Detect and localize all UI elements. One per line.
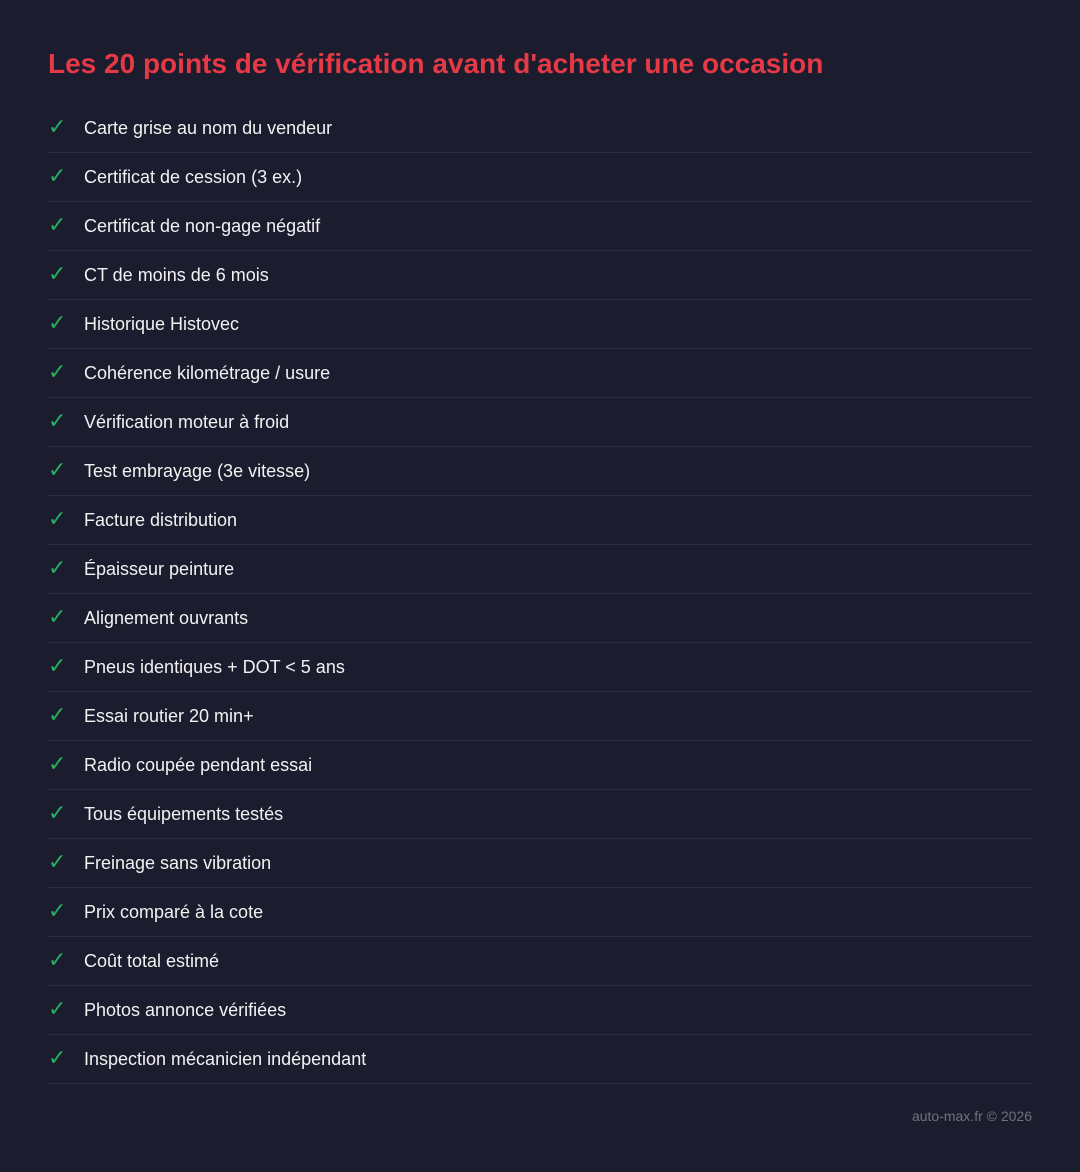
item 3 [48, 202, 1032, 251]
item 19: ✓ [48, 997, 66, 1022]
item 13: Essai routier 20 min+ [84, 706, 254, 726]
footer: auto-max.fr © 2026 [912, 1108, 1032, 1124]
item 13: ✓ [48, 703, 66, 728]
item 8 [48, 447, 1032, 496]
item 8: ✓ [48, 458, 66, 483]
item 4: ✓ [48, 262, 66, 287]
item 15 [48, 790, 1032, 839]
item 20: Inspection mécanicien indépendant [84, 1048, 366, 1068]
item 9 [48, 496, 1032, 545]
item 9: ✓ [48, 507, 66, 532]
item 11 [48, 594, 1032, 643]
item 1 [48, 104, 1032, 153]
item 13 [48, 692, 1032, 741]
item 14: ✓ [48, 752, 66, 777]
item 5: Historique Histovec [84, 314, 239, 334]
item 20 [48, 1035, 1032, 1084]
item 11: ✓ [48, 605, 66, 630]
item 15: Tous équipements testés [84, 804, 283, 824]
item 7: ✓ [48, 409, 66, 434]
item 6: Cohérence kilométrage / usure [84, 362, 330, 382]
item 18: Coût total estimé [84, 950, 219, 970]
item 2: ✓ [48, 164, 66, 189]
item 12 [48, 643, 1032, 692]
item 15: ✓ [48, 801, 66, 826]
item 19: Photos annonce vérifiées [84, 1000, 286, 1020]
item 10: ✓ [48, 556, 66, 581]
item 14: Radio coupée pendant essai [84, 754, 312, 774]
item 2: Certificat de cession (3 ex.) [84, 166, 302, 186]
item 18: ✓ [48, 948, 66, 973]
item 16: ✓ [48, 850, 66, 875]
item 3: ✓ [48, 213, 66, 238]
item 7: Vérification moteur à froid [84, 412, 289, 432]
item 4: CT de moins de 6 mois [84, 264, 269, 284]
item 10 [48, 545, 1032, 594]
item 2 [48, 153, 1032, 202]
item 16: Freinage sans vibration [84, 852, 271, 872]
item 17: ✓ [48, 899, 66, 924]
item 1: Carte grise au nom du vendeur [84, 118, 332, 138]
title: Les 20 points de vérification avant d'acheter une occasion [48, 48, 823, 79]
item 18 [48, 937, 1032, 986]
checklist [48, 115, 1032, 1084]
item 4 [48, 251, 1032, 300]
item 5 [48, 300, 1032, 349]
item 6 [48, 349, 1032, 398]
item 1: ✓ [48, 115, 66, 140]
item 9: Facture distribution [84, 510, 237, 530]
item 11: Alignement ouvrants [84, 608, 248, 628]
item 16 [48, 839, 1032, 888]
item 14 [48, 741, 1032, 790]
item 20: ✓ [48, 1046, 66, 1071]
item 12: Pneus identiques + DOT < 5 ans [84, 656, 345, 676]
item 6: ✓ [48, 360, 66, 385]
item 17: Prix comparé à la cote [84, 902, 263, 922]
item 17 [48, 888, 1032, 937]
item 5: ✓ [48, 311, 66, 336]
item 7 [48, 398, 1032, 447]
item 10: Épaisseur peinture [84, 558, 234, 578]
item 12: ✓ [48, 654, 66, 679]
item 8: Test embrayage (3e vitesse) [84, 460, 310, 480]
item 3: Certificat de non-gage négatif [84, 216, 320, 236]
item 19 [48, 986, 1032, 1035]
